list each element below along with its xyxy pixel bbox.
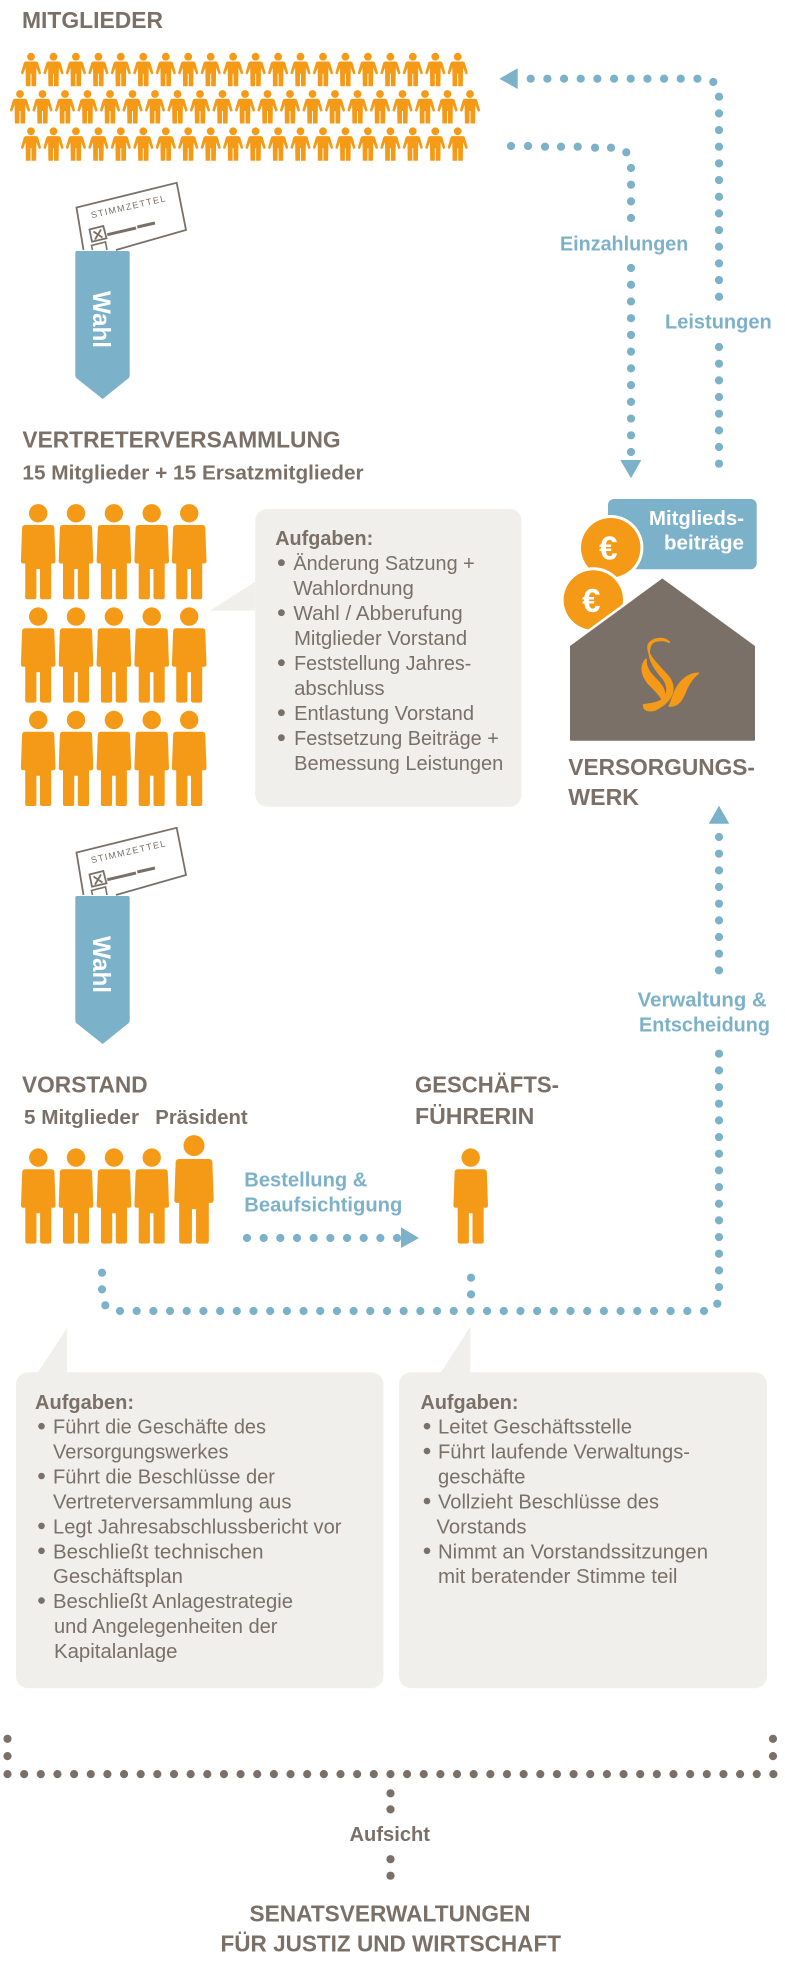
icon: euro coin 1: € bbox=[599, 529, 617, 566]
heading: Vertreterversammlung: VERTRETERVERSAMMLUNG bbox=[22, 427, 341, 453]
panel: Aufgaben Vertreterversammlung: Feststellung Jahres- bbox=[294, 653, 471, 675]
panel: Aufgaben Vorstand: Beschließt technischen bbox=[53, 1541, 264, 1563]
label: Präsident: Präsident bbox=[155, 1107, 248, 1129]
panel: Aufgaben Vertreterversammlung: Entlastung Vorstand bbox=[294, 703, 474, 725]
panel: Aufgaben Vertreterversammlung: Wahl / Abberufung bbox=[293, 603, 463, 625]
icon: ballot paper 1: STIMMZETTEL bbox=[90, 193, 166, 220]
label: Mitgliedsbeiträge: beiträge bbox=[664, 532, 744, 554]
heading: Senatsverwaltungen bbox=[220, 1901, 562, 1957]
heading: Senatsverwaltungen: SENATSVERWALTUNGEN bbox=[250, 1901, 530, 1927]
arrow: Wahl 1: Wahl bbox=[87, 291, 115, 348]
panel: Aufgaben Vorstand: und Angelegenheiten der bbox=[54, 1616, 278, 1638]
label: Mitgliedsbeiträge: Mitglieds- bbox=[649, 508, 744, 530]
arrow: Wahl 2: Wahl bbox=[87, 936, 115, 993]
arrow: Bestellung und Beaufsichtigung: Bestellung & bbox=[244, 1170, 367, 1192]
panel: Aufgaben Vertreterversammlung: Bemessung Leistungen bbox=[294, 753, 503, 775]
icon: house with logo bbox=[571, 580, 754, 740]
panel: Aufgaben Vorstand: Aufgaben: bbox=[35, 1392, 134, 1414]
icon: ballot paper 2: STIMMZETTEL bbox=[90, 838, 166, 865]
arrow: Verwaltung und Entscheidung dotted flow bbox=[101, 806, 770, 1311]
panel: Aufgaben Vorstand: Kapitalanlage bbox=[54, 1641, 178, 1663]
panel: Aufgaben Vorstand bbox=[16, 1328, 384, 1688]
panel: Aufgaben Vorstand: Führt die Geschäfte des bbox=[53, 1417, 266, 1439]
panel: Aufgaben Vorstand: Führt die Beschlüsse der bbox=[53, 1466, 275, 1488]
panel: Aufgaben Vorstand: Versorgungswerkes bbox=[53, 1442, 228, 1464]
arrow: Bestellung und Beaufsichtigung: Beaufsichtigung bbox=[244, 1195, 402, 1217]
heading: Versorgungswerk: WERK bbox=[568, 784, 639, 810]
icon: ballot paper 2 bbox=[76, 828, 186, 895]
icon group: representatives bbox=[21, 504, 207, 806]
panel: Aufgaben Geschäftsführerin: Leitet Geschäftsstelle bbox=[438, 1417, 632, 1439]
heading: Geschäftsführerin: GESCHÄFTS- bbox=[415, 1071, 559, 1097]
panel: Aufgaben Vorstand: Geschäftsplan bbox=[53, 1566, 183, 1588]
bracket: Aufsicht dotted line bbox=[3, 1735, 777, 1880]
panel: Aufgaben Vertreterversammlung: Wahlordnung bbox=[293, 578, 414, 600]
icon: managing director bbox=[453, 1148, 488, 1244]
icon: ballot paper 1 bbox=[76, 183, 186, 250]
arrow: Einzahlungen dotted flow: Einzahlungen bbox=[560, 234, 688, 256]
heading: Versorgungswerk bbox=[568, 754, 755, 810]
panel: Aufgaben Geschäftsführerin bbox=[399, 1327, 767, 1688]
panel: Aufgaben Vertreterversammlung: abschluss bbox=[294, 678, 385, 700]
arrow: Leistungen dotted flow bbox=[499, 68, 772, 464]
arrow: Verwaltung und Entscheidung dotted flow: Entscheidung bbox=[639, 1015, 770, 1037]
panel: Aufgaben Geschäftsführerin: geschäfte bbox=[438, 1466, 526, 1488]
panel: Aufgaben Geschäftsführerin: Vollzieht Beschlüsse des bbox=[438, 1491, 659, 1513]
arrow: Einzahlungen dotted flow bbox=[507, 142, 688, 478]
panel: Aufgaben Geschäftsführerin: Nimmt an Vorstandssitzungen bbox=[438, 1541, 708, 1563]
icon: euro coin 2: € bbox=[582, 582, 600, 619]
icon group: members crowd bbox=[10, 53, 480, 161]
label: Aufsicht: Aufsicht bbox=[350, 1824, 430, 1846]
heading: Senatsverwaltungen: FÜR JUSTIZ UND WIRTSCHAFT bbox=[220, 1931, 562, 1957]
arrow: Wahl 2 bbox=[75, 896, 130, 1044]
heading: Versorgungswerk: VERSORGUNGS- bbox=[568, 754, 755, 780]
panel: Aufgaben Vertreterversammlung: Aufgaben: bbox=[275, 528, 373, 550]
panel: Aufgaben Vorstand: Vertreterversammlung aus bbox=[53, 1491, 292, 1513]
panel: Aufgaben Vorstand: Beschließt Anlagestrategie bbox=[53, 1591, 293, 1613]
panel: Aufgaben Geschäftsführerin: Vorstands bbox=[436, 1516, 526, 1538]
panel: Aufgaben Geschäftsführerin: mit beratender Stimme teil bbox=[438, 1566, 678, 1588]
label: Mitgliedsbeiträge bbox=[608, 499, 757, 569]
panel: Aufgaben Geschäftsführerin: Führt laufende Verwaltungs- bbox=[438, 1442, 690, 1464]
subheading: 15 Mitglieder + 15 Ersatzmitglieder: 15 Mitglieder + 15 Ersatzmitglieder bbox=[22, 462, 364, 484]
icon group: board members and president bbox=[21, 1135, 214, 1244]
panel: Aufgaben Vertreterversammlung: Änderung Satzung + bbox=[293, 553, 475, 575]
panel: Aufgaben Vertreterversammlung bbox=[210, 509, 522, 807]
heading: Geschäftsführerin: FÜHRERIN bbox=[415, 1103, 534, 1129]
label: 5 Mitglieder: 5 Mitglieder bbox=[24, 1107, 139, 1129]
panel: Aufgaben Vertreterversammlung: Mitglieder Vorstand bbox=[294, 628, 467, 650]
panel: Aufgaben Vorstand: Legt Jahresabschlussbericht vor bbox=[53, 1516, 342, 1538]
arrow: Verwaltung und Entscheidung dotted flow: Verwaltung & bbox=[638, 990, 767, 1012]
heading: Geschäftsführerin bbox=[415, 1071, 559, 1129]
heading: Mitglieder: MITGLIEDER bbox=[22, 7, 163, 33]
icon: euro coin 2 bbox=[561, 567, 626, 633]
heading: Vorstand: VORSTAND bbox=[22, 1072, 148, 1098]
panel: Aufgaben Vertreterversammlung: Festsetzung Beiträge + bbox=[294, 728, 499, 750]
icon: euro coin 1 bbox=[578, 515, 643, 580]
arrow: Leistungen dotted flow: Leistungen bbox=[665, 311, 772, 333]
panel: Aufgaben Geschäftsführerin: Aufgaben: bbox=[420, 1392, 518, 1414]
arrow: Bestellung und Beaufsichtigung bbox=[244, 1170, 419, 1248]
arrow: Wahl 1 bbox=[75, 251, 130, 399]
